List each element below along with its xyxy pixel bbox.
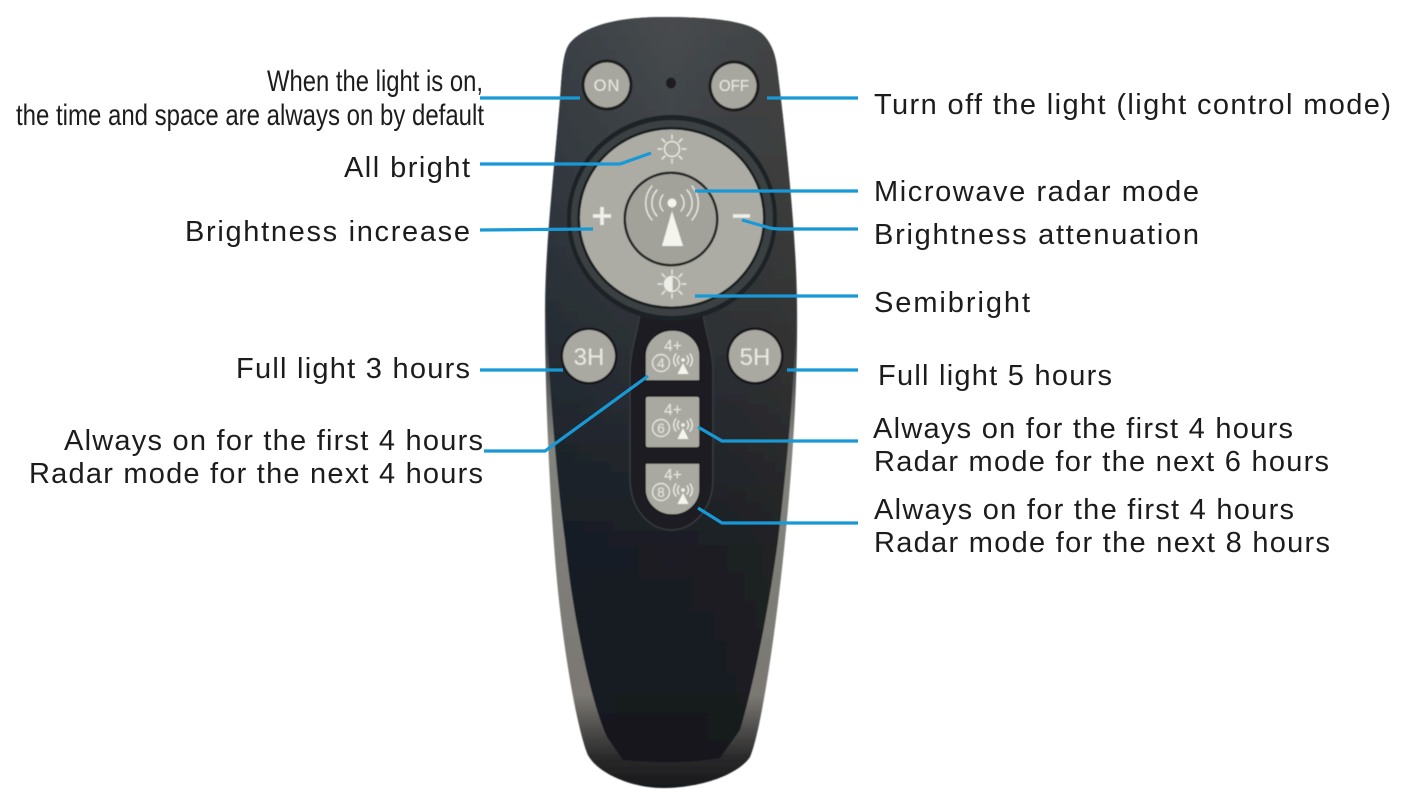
- label: 3 hours: Full light 3 hours: [236, 353, 470, 385]
- button: 3H: 3H: [574, 344, 604, 371]
- indicator light: [666, 78, 676, 88]
- centre radar button: [624, 172, 718, 266]
- label: 4+4: [29, 425, 483, 490]
- icon: plus: [593, 207, 611, 225]
- button: OFF: [708, 60, 760, 112]
- label: 4+4: Always on for the first 4 hours: [64, 425, 483, 457]
- label: 4+6: Radar mode for the next 6 hours: [874, 446, 1329, 478]
- callout lines: [480, 98, 858, 523]
- left labels: [16, 65, 484, 490]
- icon: full brightness sun: [658, 135, 686, 163]
- label: all bright: All bright: [344, 152, 470, 184]
- label: 4+8: Always on for the first 4 hours: [874, 494, 1294, 526]
- label: brightness attenuation: Brightness attenuation: [874, 219, 1199, 251]
- right labels: [873, 89, 1391, 559]
- button: ON: [582, 60, 632, 110]
- timer button recess: [630, 300, 713, 530]
- button: 4+8: [645, 463, 700, 515]
- label: brightness increase: Brightness increase: [185, 216, 470, 248]
- label: 5 hours: Full light 5 hours: [878, 360, 1112, 392]
- button: 4+6: 6: [657, 421, 665, 436]
- icon: small radar: [674, 354, 692, 374]
- icon: half brightness sun: [658, 270, 686, 298]
- label: microwave radar: Microwave radar mode: [874, 176, 1199, 208]
- icon: small radar: [674, 419, 692, 439]
- button: 4+8: 4+: [664, 467, 682, 484]
- button: 4+6: [645, 396, 700, 448]
- button: 4+6: 4+: [664, 402, 682, 419]
- button: OFF: OFF: [719, 78, 749, 95]
- label: semibright: Semibright: [874, 287, 1030, 319]
- icon: radar antenna: [646, 186, 698, 246]
- button: 4+4: [645, 330, 700, 381]
- remote control: [545, 17, 797, 788]
- dial: [567, 115, 777, 321]
- remote face: [546, 17, 796, 762]
- label: 4+6: [873, 413, 1329, 478]
- face colour tone: [546, 17, 796, 762]
- icon: small radar: [674, 484, 692, 504]
- button: 5H: 5H: [740, 344, 770, 371]
- label: ON: the time and space are always on by default: [16, 99, 484, 132]
- label: OFF: Turn off the light (light control mode): [874, 89, 1391, 121]
- remote body: [545, 17, 797, 788]
- label: 4+4: Radar mode for the next 4 hours: [29, 458, 483, 490]
- label: ON: When the light is on,: [267, 65, 483, 98]
- button: 4+4: 4: [657, 356, 665, 371]
- button: ON: ON: [594, 77, 620, 95]
- label: 4+8: [874, 494, 1330, 559]
- button: 4+8: 8: [657, 485, 665, 500]
- label: ON: [16, 65, 484, 132]
- button: 3H: [560, 328, 618, 384]
- label: 4+8: Radar mode for the next 8 hours: [874, 527, 1330, 559]
- button: 4+4: 4+: [664, 338, 682, 355]
- label: 4+6: Always on for the first 4 hours: [873, 413, 1293, 445]
- icon: minus: [733, 214, 750, 218]
- button: 5H: [726, 328, 784, 384]
